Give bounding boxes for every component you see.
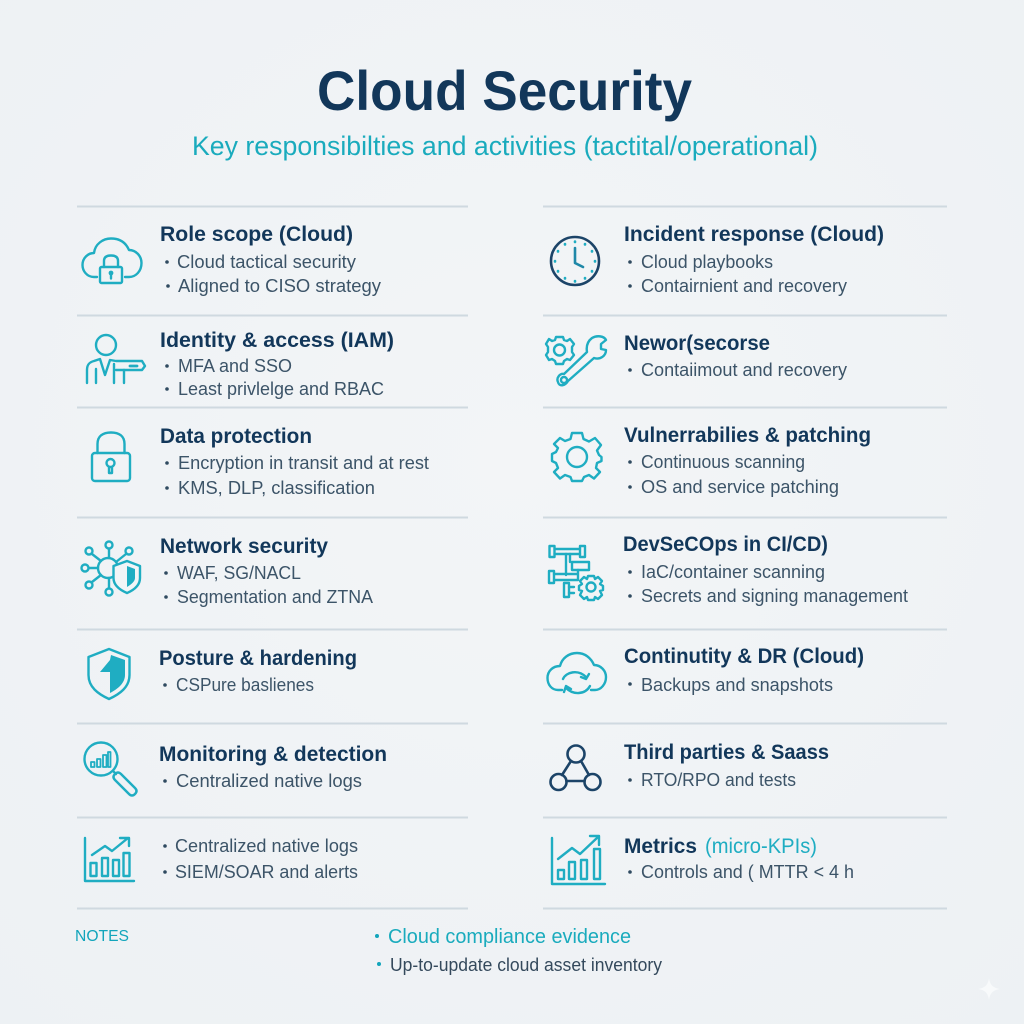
icon: sparkle bbox=[978, 978, 1000, 1000]
bullet: RTO/RPO and tests bbox=[641, 769, 796, 790]
heading: Third parties & Saass bbox=[624, 741, 829, 764]
heading: Network security bbox=[160, 535, 328, 558]
heading: Incident response (Cloud) bbox=[624, 223, 884, 246]
panel: posture and hardening bbox=[88, 647, 357, 699]
bullets: Aligned to CISO strategy bbox=[178, 275, 382, 296]
heading: Newor(secorse bbox=[624, 332, 770, 355]
icon: clock bbox=[551, 237, 599, 285]
heading bbox=[624, 835, 817, 858]
heading: Identity & access (IAM) bbox=[160, 329, 394, 352]
icon: cloud with lock bbox=[82, 238, 142, 283]
heading: Posture & hardening bbox=[159, 647, 357, 670]
panel: identity and access bbox=[87, 329, 394, 399]
bullets: SIEM/SOAR and alerts bbox=[175, 861, 358, 882]
bullets bbox=[164, 562, 374, 607]
bullets: Cloud tactical security bbox=[177, 251, 357, 272]
panel: vulnerabilities and patching bbox=[552, 424, 871, 497]
bullets bbox=[163, 835, 358, 882]
bullet: CSPure baslienes bbox=[176, 674, 314, 695]
icon: padlock bbox=[92, 432, 130, 481]
subtitle: Key responsibilties and activities (tactital/operational) bbox=[192, 131, 818, 161]
bullets bbox=[628, 561, 908, 606]
bullets bbox=[165, 452, 429, 498]
panel: monitoring and detection bbox=[84, 742, 387, 796]
notes list bbox=[375, 926, 663, 975]
bullet: Centralized native logs bbox=[176, 770, 362, 791]
panel: continuity and DR bbox=[548, 645, 864, 695]
bullets: KMS, DLP, classification bbox=[178, 477, 375, 498]
heading: Continutity & DR (Cloud) bbox=[624, 645, 864, 668]
icon: growth chart bbox=[85, 838, 134, 881]
panel: data protection bbox=[92, 425, 429, 498]
icon: pipelines with gear bbox=[549, 546, 603, 600]
bullets: IaC/container scanning bbox=[641, 561, 825, 582]
panel: metrics bbox=[552, 835, 854, 884]
bullets bbox=[165, 251, 382, 296]
heading: Role scope (Cloud) bbox=[160, 223, 353, 246]
notes label: NOTES bbox=[75, 928, 129, 945]
icon: three connected nodes bbox=[550, 746, 600, 790]
icon: gear and wrench bbox=[546, 336, 606, 385]
bullets bbox=[628, 251, 848, 296]
panel: incident response bbox=[551, 223, 884, 296]
icon: growth chart bbox=[552, 836, 605, 884]
icon: magnifier with bars bbox=[84, 742, 136, 796]
bullets: OS and service patching bbox=[641, 476, 839, 497]
icon: gear bbox=[552, 433, 602, 481]
panel: third parties bbox=[550, 741, 829, 790]
bullets: WAF, SG/NACL bbox=[177, 562, 301, 583]
heading: DevSeCOps in CI/CD) bbox=[623, 533, 828, 556]
icon: person with key bbox=[87, 335, 145, 383]
panel: role scope bbox=[82, 223, 382, 296]
bullets: Contairnient and recovery bbox=[641, 275, 848, 296]
bullets: Cloud playbooks bbox=[641, 251, 773, 272]
bullet: Backups and snapshots bbox=[641, 674, 833, 695]
bullets: Centralized native logs bbox=[175, 835, 358, 856]
icon: network nodes with shield bbox=[82, 542, 140, 596]
panel: network security bbox=[82, 535, 374, 607]
panel: devsecops bbox=[549, 533, 908, 606]
bullet: Contaiimout and recovery bbox=[641, 359, 848, 380]
heading: Monitoring & detection bbox=[159, 743, 387, 766]
notes list: Up-to-update cloud asset inventory bbox=[390, 954, 663, 975]
bullets: Continuous scanning bbox=[641, 451, 805, 472]
panel: network secure bbox=[546, 332, 848, 385]
bullet: Controls and ( MTTR < 4 h bbox=[641, 861, 854, 882]
panel: logs and alerts bbox=[85, 835, 358, 882]
bullets: Least privlelge and RBAC bbox=[178, 378, 384, 399]
bullets bbox=[165, 355, 384, 399]
bullets: Segmentation and ZTNA bbox=[177, 586, 374, 607]
bullets bbox=[628, 451, 839, 497]
icon: shield with arrow bbox=[88, 649, 130, 699]
title: Cloud Security bbox=[317, 59, 692, 122]
bullets: Encryption in transit and at rest bbox=[178, 452, 429, 473]
heading: Metrics bbox=[624, 835, 697, 858]
notes list: Cloud compliance evidence bbox=[388, 926, 631, 948]
icon: cloud with sync arrows bbox=[548, 653, 606, 693]
heading: (micro-KPIs) bbox=[705, 835, 817, 858]
heading: Data protection bbox=[160, 425, 312, 448]
bullets: MFA and SSO bbox=[178, 355, 292, 376]
bullets: Secrets and signing management bbox=[641, 585, 908, 606]
heading: Vulnerrabilies & patching bbox=[624, 424, 871, 447]
